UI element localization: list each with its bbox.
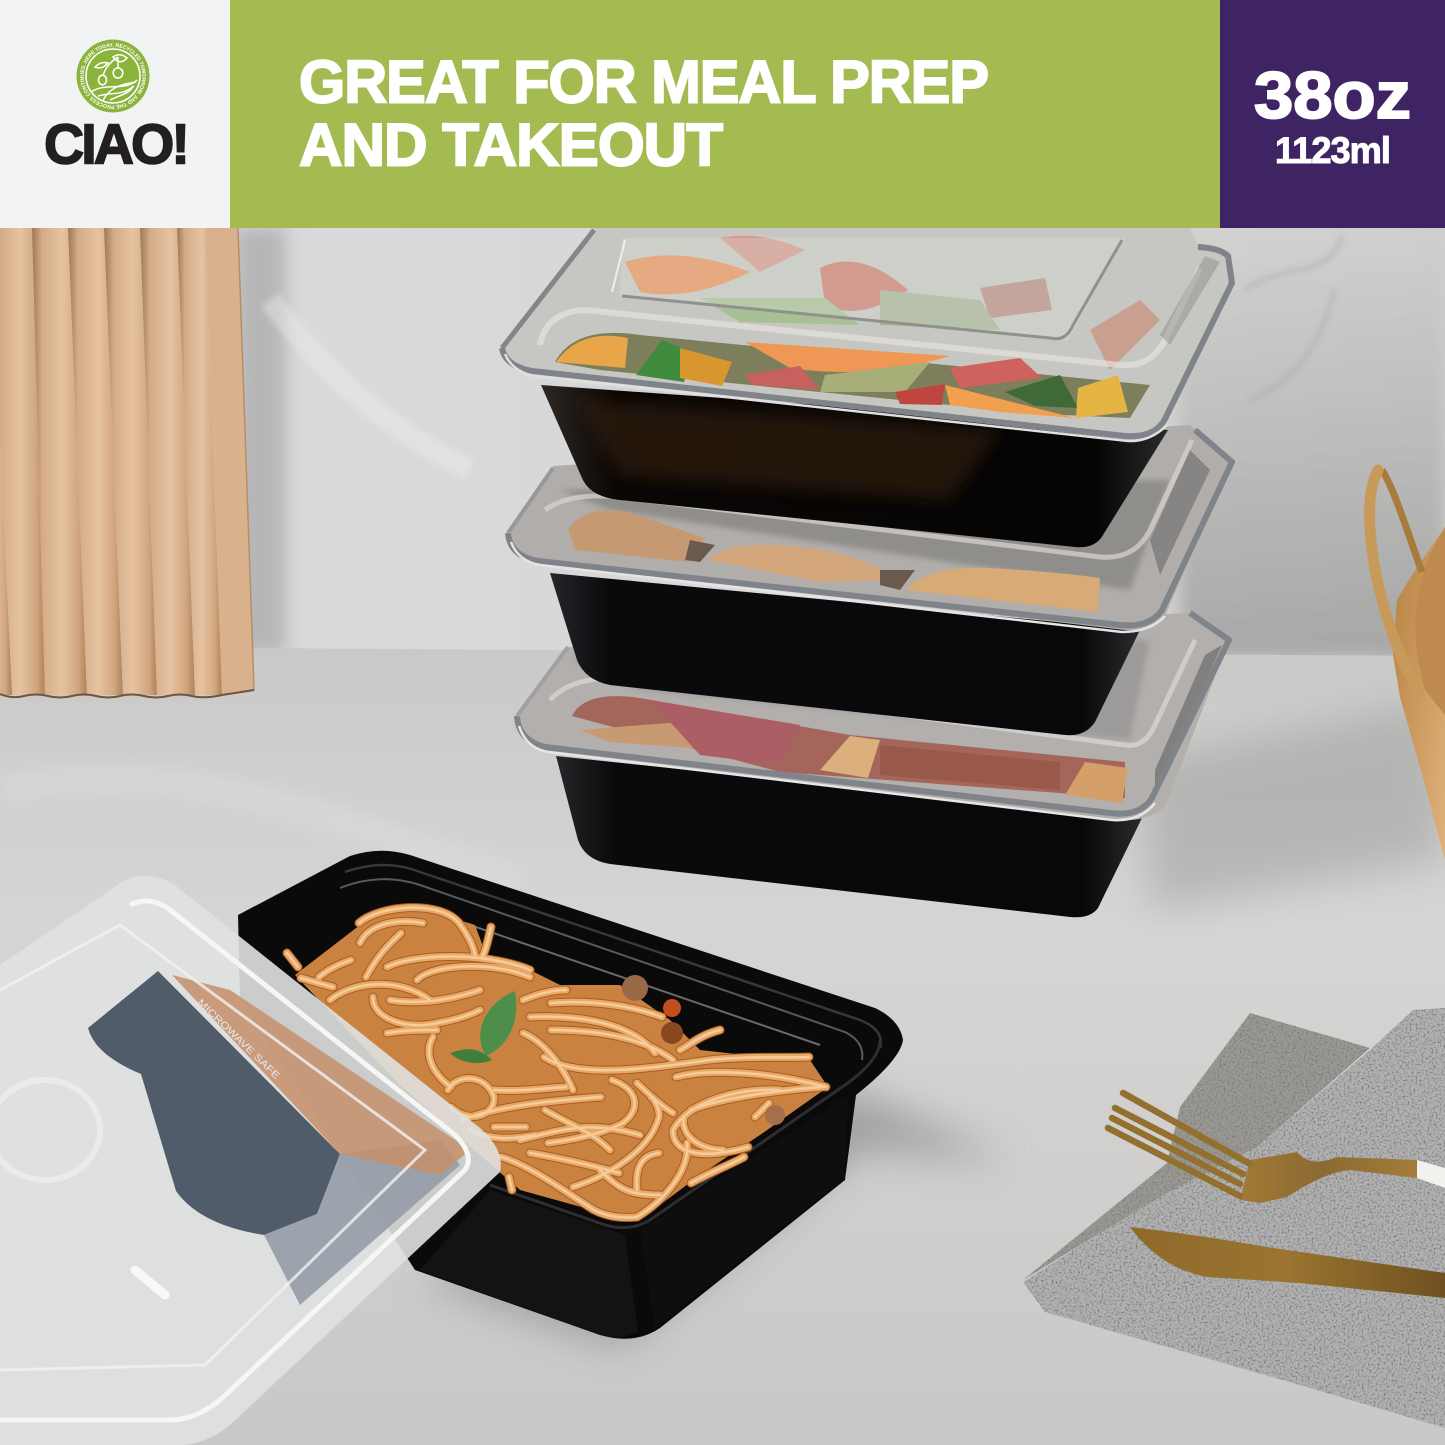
- salad seen through lid: [555, 236, 1160, 418]
- mint leaf: [450, 991, 516, 1063]
- rim: [502, 247, 1232, 436]
- open container with pasta: [238, 851, 903, 1339]
- food seen through lid: [568, 510, 1100, 612]
- black base: [550, 573, 1140, 735]
- lid embossed text: MICROWAVE SAFE: [195, 997, 282, 1082]
- gold knife: [1130, 1227, 1445, 1298]
- lid raised panel: [620, 238, 1125, 341]
- lid dome: [517, 613, 1229, 820]
- board flat edge: [205, 228, 254, 695]
- shadow on dome: [560, 480, 1170, 590]
- black outer body: [238, 851, 903, 1339]
- lid highlight: [540, 268, 1200, 365]
- header: headline panel: [230, 0, 1220, 228]
- body side faces: [420, 1190, 638, 1337]
- logo wordmark: CIAO!: [44, 112, 187, 176]
- lid dome: [508, 425, 1232, 630]
- outer blue band through lid: [264, 1140, 460, 1305]
- black base: [556, 756, 1142, 917]
- logo emblem: CONTINUES. HERE TODAY, RECYCLED TOMORROW. AND THE PROCESS: [80, 43, 146, 109]
- shadow of open container: [420, 1090, 1010, 1345]
- shadow on dome: [570, 640, 1150, 740]
- stacked container: top: [502, 228, 1232, 547]
- stacked container: middle: [508, 425, 1232, 735]
- meat sauce: [622, 975, 785, 1125]
- lid dome: [502, 228, 1232, 440]
- header: capacity panel: [1220, 0, 1445, 228]
- pasta bed: [295, 905, 828, 1220]
- rim ridges: [345, 865, 881, 1048]
- wicker basket: [1370, 470, 1445, 860]
- orange pasta tint through lid: [172, 975, 470, 1175]
- transparent lid: [0, 876, 501, 1445]
- wall marble veins: [270, 235, 1342, 470]
- pasta strands: [287, 908, 826, 1217]
- gold fork: [1108, 1093, 1445, 1203]
- photo background: wall: [0, 228, 1445, 658]
- stacked container: bottom: [517, 613, 1229, 917]
- wooden ribbed board: [0, 228, 254, 698]
- photo background: countertop: [0, 648, 1445, 1445]
- board ribs: [0, 228, 45, 695]
- capacity oz: 38oz: [1254, 58, 1411, 132]
- food seen through lid: [572, 696, 1128, 803]
- header: logo panel: [0, 0, 230, 228]
- capacity ml: 1123ml: [1275, 130, 1390, 171]
- lid ridges: [0, 901, 468, 1420]
- reflection in base: [575, 400, 1000, 500]
- black base: [541, 385, 1168, 547]
- container seen through lid: [88, 971, 340, 1235]
- lid highlight: [550, 640, 1195, 745]
- headline: GREAT FOR MEAL PREP: [299, 48, 988, 116]
- rim: [508, 430, 1232, 625]
- folded grey napkin: [1023, 1008, 1445, 1428]
- rim: [517, 613, 1229, 814]
- header: headline panel: AND TAKEOUT: [299, 112, 722, 178]
- lid highlight: [545, 440, 1192, 557]
- lid plate: [0, 876, 501, 1445]
